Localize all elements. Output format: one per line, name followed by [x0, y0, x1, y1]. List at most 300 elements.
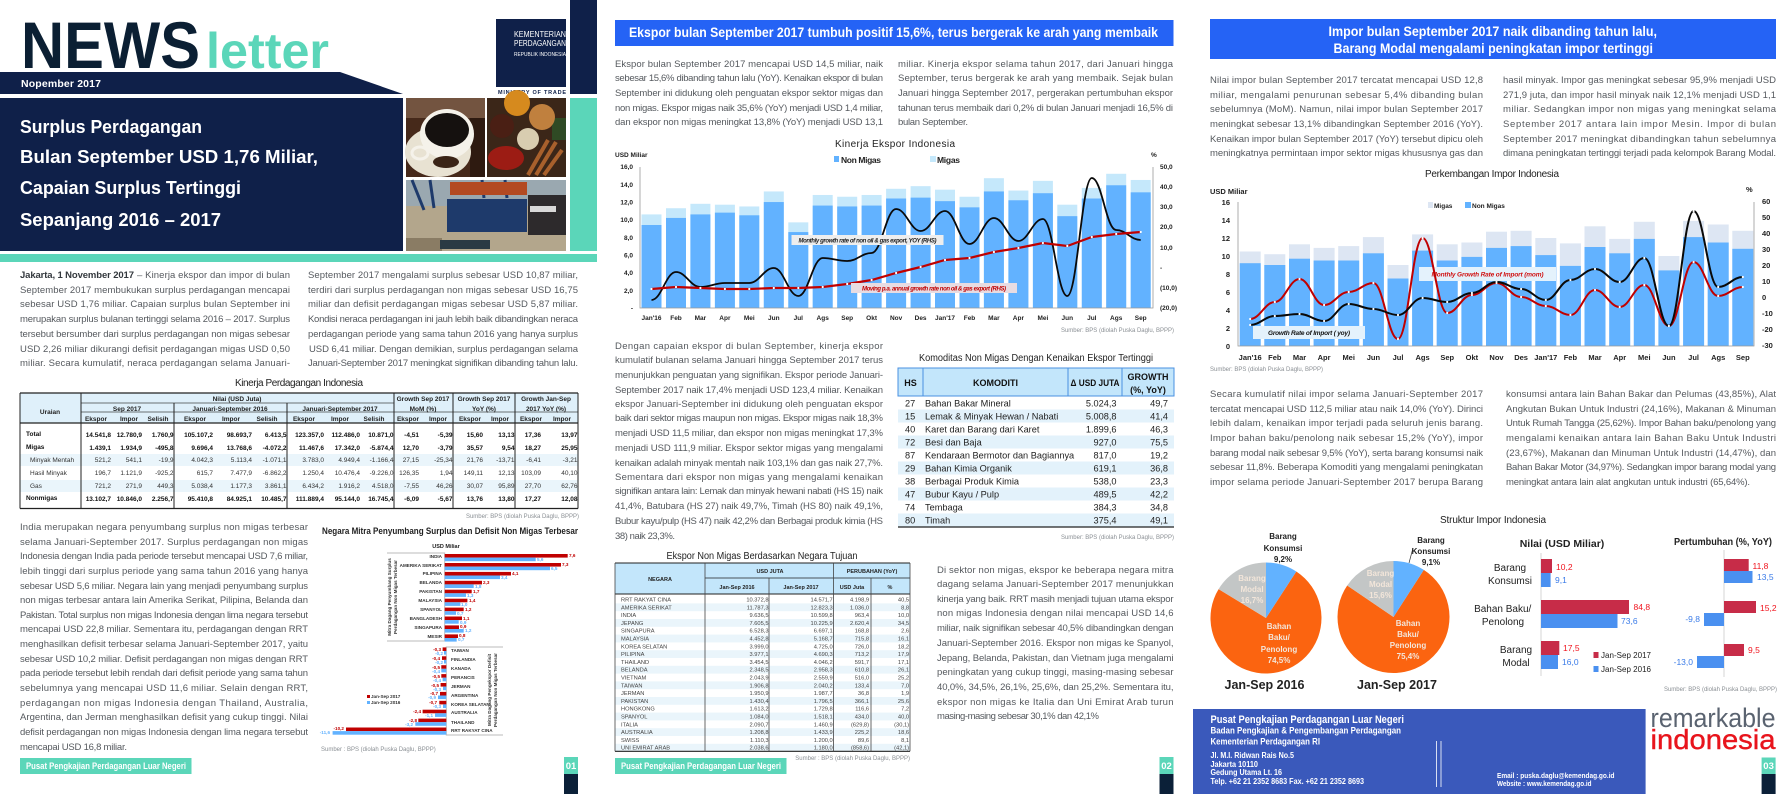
chart: surplus partner countries: BANGLADESH: [410, 616, 443, 621]
table: export destinations: BELANDA: [621, 668, 648, 674]
text block: imports left: Nilai impor bulan September 2017 tercatat mencapai USD 12,8: [1210, 75, 1483, 86]
text block: intro right: terdiri dari surplus perdagangan non migas sebesar USD 16,75: [308, 285, 578, 296]
chart: deficit partner countries: -0,3: [433, 687, 441, 692]
text block: cumulative imports right: Angkutan Bukan Untuk Industri (24,16%), Makanan & Minuman: [1506, 404, 1776, 415]
table: trade performance: -5,67: [438, 496, 453, 503]
table: top commodities: 15: [905, 412, 915, 422]
table: export destinations: 2.040,2: [814, 683, 833, 689]
text block: cumulative exports: signifikan antara lain: Lemak dan minyak hewani nabati (HS 15) naik: [615, 486, 883, 497]
chart: surplus partner countries: Perdagangan Non Migas Terbesar: [393, 560, 398, 634]
table: top commodities: 49,1: [1150, 516, 1168, 526]
table: export destinations: RRT RAKYAT CINA: [621, 598, 671, 604]
chart: export performance: Mei: [744, 315, 755, 322]
legend: Non Migas: [1472, 203, 1505, 210]
chart: surplus partner countries: 1,2: [465, 607, 472, 612]
table: top commodities: Kendaraan Bermotor dan Bagiannya: [925, 450, 1075, 460]
footer panel: contact: Website : www.kemendag.go.id: [1497, 779, 1592, 788]
chart: deficit partner countries: Perdagangan Non Migas Terbesar: [493, 653, 498, 727]
chart: export performance: 2,0: [624, 288, 633, 295]
bar chart: import value: 10,2: [1556, 562, 1573, 572]
annotation: moving annual growth: Moving p.a. annual growth rate non oil & gas export (RHS): [862, 286, 1006, 292]
table: trade performance: 25,95: [561, 445, 578, 452]
table: trade performance: -6,09: [404, 496, 419, 503]
table: trade performance: 10.846,0: [117, 496, 142, 503]
table: export destinations: (42,1): [894, 746, 909, 752]
table: trade performance: 105.107,2: [184, 432, 213, 439]
chart: deficit partner countries: -0,9: [428, 695, 436, 700]
chart: deficit partner countries: THAILAND: [451, 720, 475, 725]
text block: destinations: Januari-September 2016. Ekspor non migas ke Spanyol,: [937, 638, 1174, 649]
table: top commodities: Bubur Kayu / Pulp: [925, 490, 999, 500]
table: trade performance: 18,27: [525, 445, 541, 452]
text block: imports right: September 2017 meningkat dibandingkan tahun sebelumnya: [1503, 134, 1777, 145]
annotation: moving annual growth: [851, 283, 1017, 293]
chart: import development: Okt: [1466, 353, 1479, 362]
table: top commodities: Lemak & Minyak Hewan / Nabati: [925, 412, 1058, 422]
source note: Sumber: BPS (diolah Puska Daglu, BPPP): [1061, 535, 1174, 541]
text block: cumulative imports right: [1506, 389, 1776, 488]
table: export destinations: 1.200,0: [814, 738, 833, 744]
heading: import chart: Perkembangan Impor Indonesia: [1425, 169, 1559, 180]
table: trade performance: 2017 YoY (%): [526, 406, 566, 413]
text block: intro left: USD 2,26 miliar dikurangi defisit perdagangan migas USD 0,50: [20, 344, 290, 355]
chart: surplus partner countries: 1,2: [465, 628, 472, 633]
chart: deficit partner countries: RRT RAKYAT CINA: [451, 728, 493, 733]
table: top commodities: Bahan Kimia Organik: [925, 464, 1012, 474]
table: top commodities: 27: [905, 398, 915, 408]
text block: cumulative imports right: (23,67%), Makanan dan Minuman Untuk Industri (14,47%), dan: [1506, 448, 1776, 459]
legend: [834, 155, 960, 165]
chart: deficit partner countries: -0,2: [435, 651, 443, 656]
side strip: [570, 0, 597, 251]
title panel: Bulan September USD 1,76 Miliar,: [20, 147, 318, 167]
table: export destinations: AUSTRALIA: [621, 730, 653, 736]
footer panel: contact: Telp. +62 21 2352 8683 Fax. +62 21 2352 8693: [1210, 777, 1364, 786]
table: trade performance: 9,54: [502, 445, 515, 452]
chart: deficit partner countries: -0,5: [432, 665, 440, 670]
chart: export performance: Des: [915, 315, 927, 322]
chart: export performance: %: [1151, 152, 1157, 159]
chart: deficit partner countries: -10,2: [334, 726, 344, 731]
text block: cumulative exports: Sementara dari ekspor non migas yang mengalami kenaikan: [615, 472, 883, 483]
table: top commodities: 817,0: [1094, 450, 1116, 460]
table: trade performance: -5.874,4: [370, 445, 394, 452]
table: export destinations: USD Juta: [840, 585, 865, 591]
pie chart: Jan-Sep 2017: Barang: [1417, 536, 1445, 545]
table: trade performance: 196,7: [95, 470, 111, 477]
pie chart: Jan-Sep 2017: Penolong: [1390, 641, 1426, 650]
table: export destinations: SPANYOL: [621, 714, 647, 720]
text block: exports left: non migas. Ekspor migas naik 35,6% (YoY) menjadi USD 1,4 miliar,: [615, 103, 883, 114]
chart: export performance: (10,0): [1160, 285, 1177, 292]
text block: imports left: meningkat sebesar 13,1% dibandingkan September 2016 (YoY).: [1210, 119, 1483, 130]
source note: Sumber : BPS (diolah Puska Daglu, BPPP): [795, 756, 910, 762]
chart: import development: 40: [1762, 229, 1770, 238]
pie chart: Jan-Sep 2017: Konsumsi: [1412, 547, 1450, 556]
chart: deficit partner countries: -0,7: [429, 700, 437, 705]
table: export destinations: Jan-Sep 2017: [783, 585, 819, 591]
chart: import development: 50: [1762, 213, 1770, 222]
chart: deficit partner countries: -0,4: [432, 669, 440, 674]
text block: india paragraph: selama Januari-September 2017. Surplus perdagangan non migas: [20, 537, 308, 548]
logo: ministry of trade: [496, 19, 567, 96]
table: export destinations: 2,6: [901, 629, 909, 635]
bar chart: import value: [1474, 538, 1650, 676]
table: top commodities: 42,2: [1150, 490, 1168, 500]
legend: import bars: Jan-Sep 2016: [1601, 665, 1652, 674]
text block: cumulative exports: 38) naik 23,3%.: [615, 531, 675, 542]
table: trade performance: 84.925,1: [227, 496, 252, 503]
table: trade performance: Impor: [331, 416, 349, 423]
chart: export performance: Mar: [988, 315, 1000, 322]
table: export destinations: 2.348,5: [750, 668, 768, 674]
table: trade performance: -6,41: [526, 457, 541, 464]
table: trade performance: 13.102,7: [86, 496, 111, 503]
table: export destinations: 610,8: [855, 668, 869, 674]
chart: surplus partner countries: 0,7: [457, 611, 464, 616]
chart: import development: Jul: [1688, 353, 1699, 362]
pie chart: Jan-Sep 2016: Modal: [1240, 585, 1264, 594]
table: trade performance: 615,7: [197, 470, 213, 477]
table: trade performance: Ekspor: [85, 416, 107, 423]
chart: surplus partner countries: PAKISTAN: [419, 589, 443, 594]
chart: deficit partner countries: -0,3: [433, 647, 441, 652]
text block: cumulative imports left: Impor bahan baku/penolong naik sebesar 15,2% (YoY), impor: [1210, 433, 1483, 444]
table: export destinations: THAILAND: [621, 660, 649, 666]
bar chart: import value: Penolong: [1482, 617, 1524, 628]
bar chart: import growth: 13,5: [1757, 572, 1774, 582]
table: trade performance: YoY (%): [472, 406, 496, 413]
chart: export performance: 20,0: [1160, 224, 1173, 231]
table: trade performance: 1.121,9: [120, 470, 142, 477]
table: trade performance: 541,1: [126, 457, 142, 464]
chart: export performance: Apr: [719, 315, 731, 322]
text block: cumulative exports: kenaikan adalah minyak mentah naik 103,1% dan gas naik 27,7%.: [615, 458, 883, 469]
chart: surplus partner countries: 6,5: [551, 566, 558, 571]
table: top commodities: 80: [905, 516, 915, 526]
table: trade performance: Growth Jan-Sep: [521, 396, 571, 403]
table: trade performance: 13.768,6: [227, 445, 252, 452]
table: export destinations: 16,1: [898, 636, 909, 642]
chart: import development: 8: [1226, 270, 1230, 279]
text block: destinations: non migas Indonesia dengan nilai mencapai USD 14,6: [937, 608, 1174, 619]
table: trade performance: Impor: [222, 416, 240, 423]
chart: export performance: Jul: [1087, 315, 1097, 322]
chart: import development: Des: [1514, 353, 1528, 362]
table: export destinations: UNI EMIRAT ARAB: [621, 746, 670, 752]
table: top commodities: 75,5: [1150, 438, 1168, 448]
table: trade performance: 5.038,4: [191, 483, 213, 490]
source note: Sumber: BPS (diolah Puska Daglu, BPPP): [1210, 367, 1323, 373]
text block: intro left: miliar. Secara kumulatif, neraca perdagangan selama Januari-: [20, 358, 290, 369]
heading: commodities table: Komoditas Non Migas Dengan Kenaikan Ekspor Tertinggi: [919, 353, 1153, 364]
chart: export performance: Jul: [794, 315, 803, 322]
text block: exports left: September ini didukung oleh penguatan ekspor sektor migas dan: [615, 88, 883, 99]
chart: surplus partner countries: MALAYSIA: [418, 598, 443, 603]
chart: surplus partner countries: BELANDA: [420, 580, 443, 585]
table: trade performance: Januari-September 2017: [302, 406, 378, 413]
table: trade performance: 40,10: [561, 470, 578, 477]
table: trade performance: Nonmigas: [26, 495, 58, 502]
chart: export performance: 40,0: [1160, 184, 1173, 191]
heading: import structure: Struktur Impor Indonesia: [1440, 515, 1546, 526]
chart: export performance: 10,0: [620, 217, 633, 224]
table: top commodities: 927,0: [1094, 438, 1116, 448]
chart: surplus partner countries: MESIR: [427, 634, 443, 639]
chart: import development: [1210, 185, 1773, 362]
heading: destination table: Ekspor Non Migas Berdasarkan Negara Tujuan: [666, 551, 858, 562]
table: trade performance: 1.439,1: [89, 445, 111, 452]
chart: deficit partner countries: -2,8: [409, 718, 417, 723]
text block: india paragraph: sebelumnya yang mencapai USD 11,6 miliar. Selain dengan RRT,: [20, 683, 308, 694]
table: export destinations: 1.950,9: [750, 691, 768, 697]
table: export destinations: 26,1: [898, 668, 909, 674]
table: trade performance: Selisih: [364, 416, 384, 423]
table: trade performance: Impor: [429, 416, 447, 423]
table: top commodities: Tembaga: [925, 502, 964, 512]
table: trade performance: 13,13: [498, 432, 515, 439]
footer panel: contact: Pusat Pengkajian Perdagangan Luar Negeri: [1210, 714, 1404, 726]
table: trade performance: -1.071,1: [263, 457, 287, 464]
table: export destinations: [615, 563, 910, 752]
chart: deficit partner countries: Mitra Dagang Pengekspor Defisit: [487, 654, 492, 726]
bar chart: import value: Bahan Baku/: [1474, 604, 1532, 615]
table: top commodities: 489,5: [1094, 490, 1116, 500]
chart: import development: 10: [1762, 277, 1770, 286]
text block: india paragraph: perdagangan non migas Indonesia dengan Thailand, Australia,: [20, 698, 308, 709]
table: trade performance: Impor: [120, 416, 138, 423]
chart: surplus partner countries: USD Miliar: [432, 544, 461, 550]
table: export destinations: 225,2: [855, 730, 869, 736]
photo: coffee: [405, 98, 485, 177]
source note: Sumber : BPS (diolah Puska Daglu, BPPP): [321, 747, 436, 753]
text block: cumulative exports: kumulatif bulanan selama Januari hingga September 2017 terus: [615, 355, 883, 366]
text block: exports left: dan ekspor non migas meningkat 13,8% (YoY) menjadi USD 13,1: [615, 117, 883, 128]
table: trade performance: 13,80: [498, 496, 515, 503]
bar chart: import value: Modal: [1502, 658, 1530, 669]
text block: cumulative exports: menunjukkan penguatan yang signifikan. Ekspor periode Januari-: [615, 370, 883, 381]
table: trade performance: Ekspor: [184, 416, 206, 423]
legend: [1428, 202, 1505, 210]
table: export destinations: PAKISTAN: [621, 699, 648, 705]
table: top commodities: 36,8: [1150, 464, 1168, 474]
table: export destinations: 18,2: [898, 644, 909, 650]
chart: import development: 0: [1762, 293, 1766, 302]
source note: Sumber: BPS (diolah Puska Daglu, BPPP): [1061, 328, 1174, 334]
table: trade performance: 10.476,4: [335, 470, 360, 477]
table: export destinations: 4.198,9: [850, 598, 869, 604]
chart: deficit partner countries: KOREA SELATAN: [451, 702, 490, 707]
table: export destinations: 4.725,0: [814, 644, 833, 650]
text block: india paragraph: menghasilkan defisit terbesar selama Januari-September 2017, yaitu: [20, 639, 308, 650]
chart: import development: -20: [1762, 325, 1773, 334]
table: top commodities: Karet dan Barang dari Karet: [925, 424, 1040, 434]
table: export destinations: TAIWAN: [621, 683, 642, 689]
table: trade performance: 1.760,9: [152, 432, 174, 439]
text block: exports right: tahunan terus membaik dari 0,2% di bulan Januari menjadi 16,5% di: [898, 103, 1173, 114]
table: trade performance: Ekspor: [293, 416, 315, 423]
table: export destinations: 6.697,1: [814, 629, 833, 635]
table: trade performance: Selisih: [148, 416, 168, 423]
pie chart: Jan-Sep 2017: 9,1%: [1422, 558, 1440, 567]
table: trade performance: 6.413,5: [265, 432, 287, 439]
text block: exports right: bulan September.: [898, 117, 968, 128]
text block: destinations: Di sektor non migas, ekspor ke beberapa negara mitra: [937, 565, 1174, 576]
table: trade performance: 5.113,4: [231, 457, 252, 464]
table: export destinations: AMERIKA SERIKAT: [621, 605, 672, 611]
text block: intro right: miliar dan defisit perdagangan migas sebesar USD 5,87 miliar.: [308, 299, 578, 310]
table: trade performance: 15,60: [467, 432, 483, 439]
table: trade performance: Impor: [491, 416, 509, 423]
page number 02: 02: [1161, 761, 1172, 772]
table: export destinations: 1.430,4: [750, 699, 768, 705]
source note: Sumber: BPS (diolah Puska Daglu, BPPP): [466, 514, 579, 520]
title panel: Sepanjang 2016 – 2017: [20, 210, 221, 230]
table: trade performance: 30,07: [467, 483, 483, 490]
footer panel: contact: Gedung Utama Lt. 16: [1210, 768, 1282, 777]
table: top commodities: [898, 368, 1174, 527]
table: trade performance: 1.250,4: [302, 470, 324, 477]
table: export destinations: 4.046,2: [814, 660, 833, 666]
table: trade performance: [20, 393, 578, 508]
chart: export performance: 8,0: [624, 235, 633, 242]
chart: import development: %: [1746, 185, 1753, 194]
chart: export performance: -: [631, 306, 633, 312]
table: export destinations: 2.090,7: [750, 722, 768, 728]
pie chart: Jan-Sep 2016: Baku/: [1268, 633, 1291, 642]
chart: import development: Mar: [1293, 353, 1306, 362]
chart: import development: 10: [1222, 252, 1230, 261]
chart: export performance: Apr: [1013, 315, 1024, 322]
chart: import development: Mar: [1588, 353, 1602, 362]
text block: imports right: miliar. Sedangkan impor non migas yang meningkat selama: [1503, 104, 1777, 115]
text block: intro left: – Kinerja ekspor dan impor di bulan: [137, 270, 290, 281]
chart: export performance: 14,0: [620, 182, 633, 189]
text block: india paragraph: India merupakan negara penyumbang surplus non migas terbesar: [20, 522, 308, 533]
line: moving annual growth: [652, 232, 1141, 289]
table: export destinations: 2.958,3: [814, 668, 833, 674]
text block: intro right: [308, 270, 579, 369]
table: export destinations: 7.605,5: [750, 621, 768, 627]
text block: india paragraph: Argentina, dan Jerman menghasilkan defisit yang cukup tinggi. Nilai: [20, 712, 308, 723]
table: top commodities: Δ USD JUTA: [1070, 378, 1120, 388]
table: export destinations: %: [888, 585, 893, 591]
table: top commodities: 34,8: [1150, 502, 1168, 512]
heading: imports: Barang Modal mengalami peningkatan impor tertinggi: [1334, 41, 1653, 56]
chart: export performance: Okt: [866, 315, 878, 322]
table: export destinations: NEGARA: [648, 577, 672, 583]
text block: india paragraph: sebesar USD 5,6 miliar. Negara lain yang menjadi penyumbang surplus: [20, 581, 308, 592]
text block: cumulative imports right: mengalami kenaikan antara lain Bahan Baku Untuk Industri: [1506, 433, 1776, 444]
chart: import development: -10: [1762, 309, 1773, 318]
chart: export performance: 16,0: [620, 164, 633, 171]
table: top commodities: 384,3: [1094, 502, 1116, 512]
pie chart: Jan-Sep 2017: Modal: [1369, 580, 1392, 589]
chart: import development: Jan'16: [1239, 353, 1262, 362]
table: top commodities: 38: [905, 476, 915, 486]
table: top commodities: Timah: [925, 516, 950, 526]
table: top commodities: KOMODITI: [973, 378, 1018, 388]
text block: destinations: peningkatan yang cukup tinggi, masing-masing sebesar: [937, 667, 1174, 678]
table: top commodities: 47: [905, 490, 915, 500]
text block: intro right: September 2017 mengalami surplus sebesar USD 10,87 miliar,: [308, 270, 578, 281]
table: trade performance: Nilai (USD Juta): [213, 396, 261, 403]
text block: cumulative imports left: Secara kumulatif nilai impor selama Januari-September 2017: [1210, 389, 1483, 400]
table: trade performance: 21,76: [467, 457, 483, 464]
table: export destinations: 1.906,8: [750, 683, 768, 689]
table: trade performance: 721,2: [95, 483, 111, 490]
table: export destinations: HONGKONG: [621, 707, 655, 713]
table: trade performance: 12,70: [403, 445, 419, 452]
table: trade performance: 112.486,0: [331, 432, 360, 439]
table: export destinations: 8,8: [901, 605, 909, 611]
chart: import development: Jun: [1367, 353, 1380, 362]
table: trade performance: Impor: [553, 416, 571, 423]
chart: surplus partner countries: 1,3: [467, 593, 474, 598]
pie chart: Jan-Sep 2016: Jan-Sep 2016: [1225, 678, 1304, 692]
table: export destinations: PERUBAHAN (YoY): [847, 569, 897, 575]
table: export destinations: 1.729,8: [814, 707, 833, 713]
table: trade performance: -6.862,2: [263, 470, 287, 477]
text block: destinations: Jepang, Belanda, Pakistan, dan Vietnam juga mengalami: [937, 653, 1174, 664]
photo: container port: [406, 180, 566, 251]
table: trade performance: Ekspor: [520, 416, 542, 423]
table: export destinations: 7,0: [901, 683, 909, 689]
table: top commodities: Besi dan Baja: [925, 438, 983, 448]
chart: export performance: 10,0: [1160, 245, 1173, 252]
table: trade performance: 17,36: [525, 432, 541, 439]
table: top commodities: 5.008,8: [1086, 412, 1116, 422]
chart: surplus partner countries: INDIA: [429, 554, 443, 559]
chart: export performance: Feb: [964, 315, 975, 322]
table: trade performance: 126,35: [399, 470, 419, 477]
table: trade performance: 10.485,7: [261, 496, 287, 503]
table: trade performance: 271,9: [126, 483, 142, 490]
pie chart: Jan-Sep 2016: Bahan: [1267, 622, 1291, 631]
text block: imports left: meningkatnya permintaan impor sektor migas khususnya gas dan: [1210, 148, 1483, 159]
logo: ministry of trade: REPUBLIK INDONESIA: [514, 52, 567, 58]
text block: intro left: Jakarta, 1 November 2017: [20, 270, 134, 281]
table: export destinations: 1.110,3: [750, 738, 768, 744]
table: export destinations: 1.518,1: [814, 714, 833, 720]
table: trade performance: 1.934,9: [120, 445, 142, 452]
table: top commodities: 72: [905, 438, 915, 448]
chart: export performance: Sep: [1135, 315, 1147, 322]
text block: imports left: Kenaikan impor bulan September 2017 (YoY) tersebut dipicu oleh: [1210, 134, 1483, 145]
table: trade performance: -1.166,4: [370, 457, 394, 464]
table: trade performance: 12,13: [498, 470, 515, 477]
photo: spices: [487, 90, 566, 177]
teal divider bar: [0, 254, 597, 262]
page number 01: 01: [566, 761, 577, 772]
chart: export performance: Mei: [1037, 315, 1049, 322]
chart: deficit partner countries: [320, 647, 503, 735]
chart: export performance: Sep: [841, 315, 853, 322]
table: top commodities: Berbagai Produk Kimia: [925, 476, 1020, 486]
text block: india paragraph: lebih tinggi dari surplus periode yang sama tahun 2016 yang hanya: [20, 566, 309, 577]
chart: export performance: -: [1160, 265, 1162, 272]
text block: india paragraph: mencapai USD 22,8 miliar. Sementara itu, perdagangan dengan RRT: [20, 624, 308, 635]
table: trade performance: -25,34: [434, 457, 453, 464]
pie chart: Jan-Sep 2017: Baku/: [1397, 630, 1420, 639]
table: trade performance: 62,76: [561, 483, 578, 490]
text block: imports right: hasil minyak. Impor gas meningkat sebesar 95,9% menjadi USD: [1503, 75, 1776, 86]
bar chart: import growth: -13,0: [1674, 657, 1693, 667]
table: trade performance: 98.693,7: [227, 432, 252, 439]
table: top commodities: 29: [905, 464, 915, 474]
table: trade performance: -3,21: [563, 457, 578, 464]
table: export destinations: 366,1: [855, 699, 869, 705]
